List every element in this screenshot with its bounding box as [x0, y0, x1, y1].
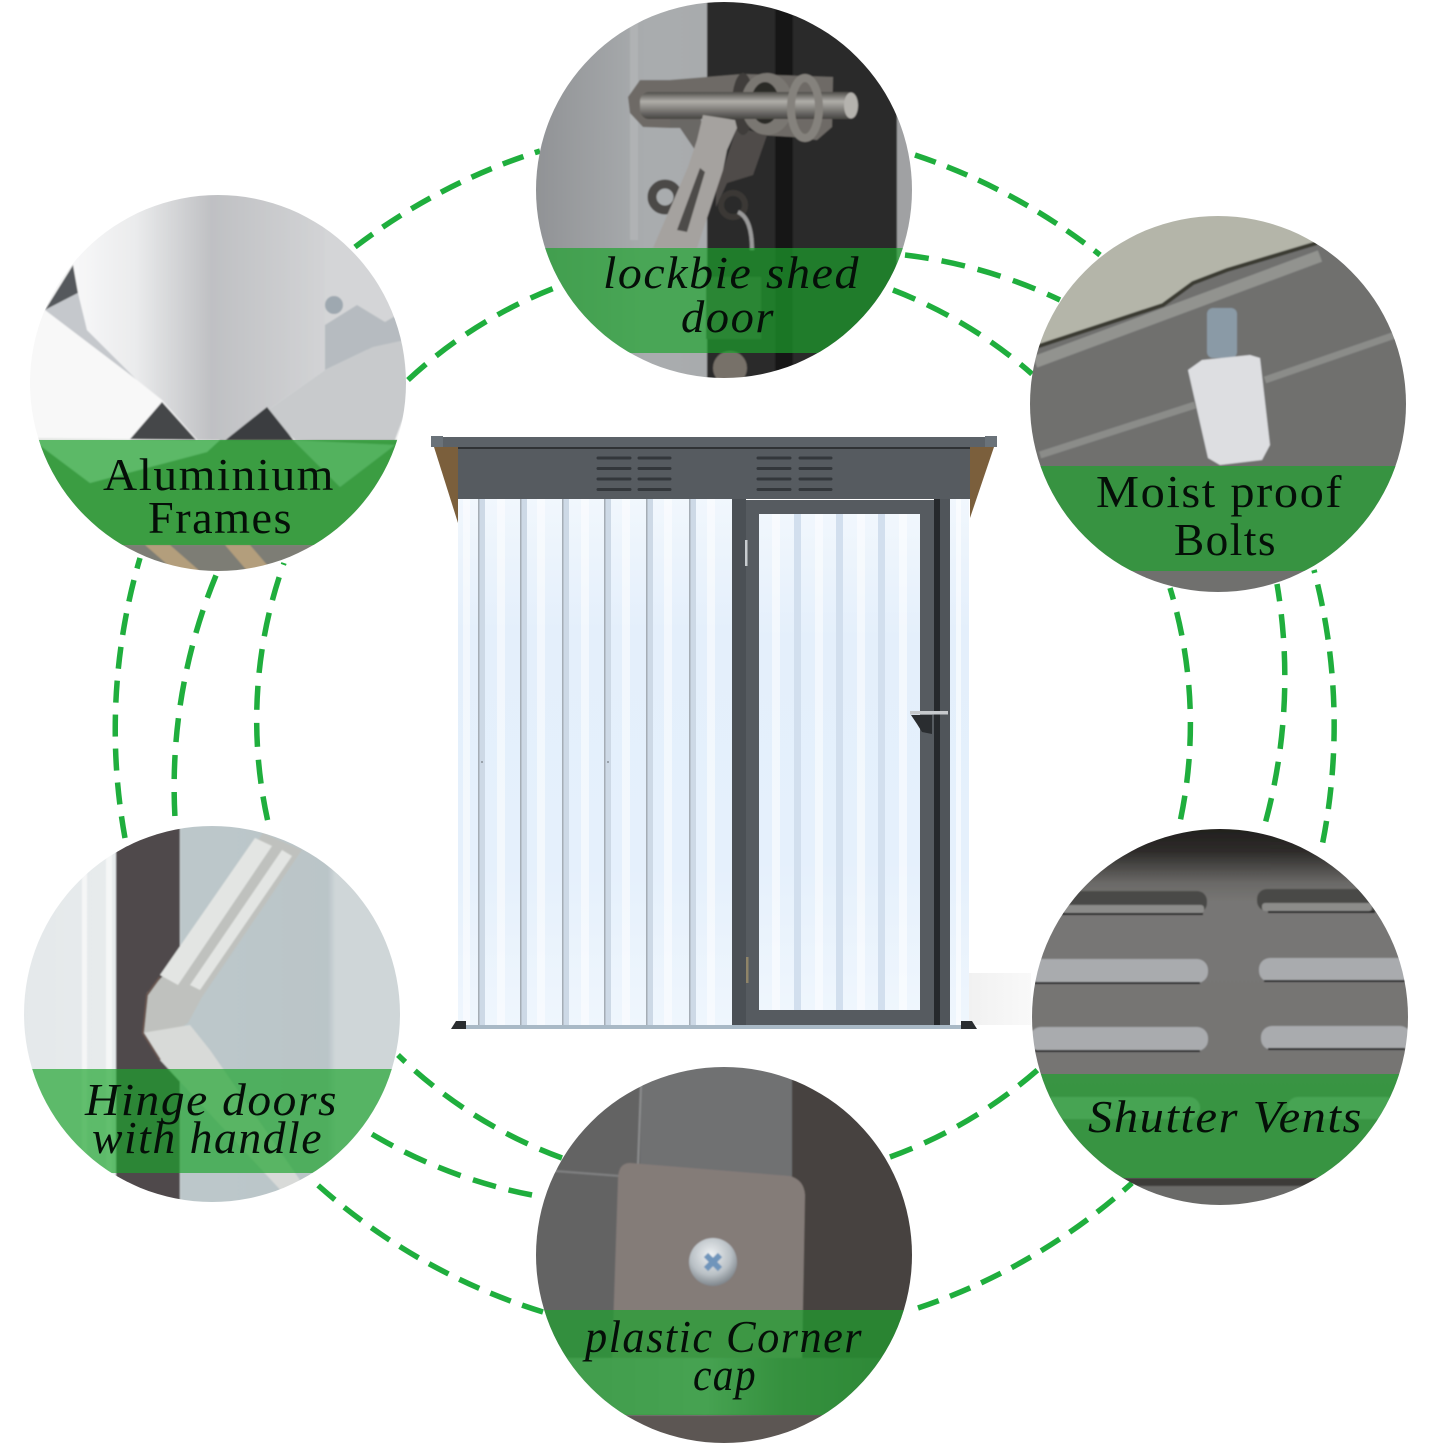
photo: bolt cap [1025, 205, 1415, 600]
dashed ring connectors [115, 151, 1334, 1312]
green label band [530, 1310, 920, 1415]
photo: louvre slots [1025, 825, 1415, 1211]
green label band [1025, 1074, 1415, 1178]
roof eaves [434, 447, 994, 523]
wall panel right [950, 499, 969, 1025]
green label band [530, 248, 920, 353]
photo: corner cap and screw [530, 1060, 922, 1445]
wall panel left [458, 499, 732, 1025]
green label band [25, 440, 415, 545]
label: lockbie shed door [603, 247, 860, 342]
door opening [759, 514, 920, 1010]
panel: aluminium frames [38, 195, 406, 571]
label: Moist proof Bolts: Moist proof [1096, 466, 1343, 517]
vents [598, 458, 831, 490]
label: Moist proof Bolts [1096, 466, 1343, 565]
label: Hinge doors with handle: Hinge doors [84, 1074, 338, 1125]
label: Hinge doors with handle: with handle [92, 1112, 323, 1163]
label: plastic Corner cap [582, 1311, 863, 1400]
panel: moist proof bolts [1025, 205, 1415, 600]
door latch [910, 711, 948, 734]
base rail and feet [451, 1021, 977, 1029]
green label band [20, 1069, 405, 1173]
label: Shutter Vents: Shutter Vents [1088, 1091, 1363, 1142]
photo: frame corner [38, 195, 406, 571]
photo: hasp lock [530, 0, 922, 385]
label: Hinge doors with handle [84, 1074, 338, 1163]
label: plastic Corner cap: plastic Corner [582, 1311, 863, 1362]
label: Aluminium Frames: Frames [148, 492, 293, 543]
door frame [746, 500, 934, 1025]
label: lockbie shed door: door [681, 291, 775, 342]
photo: hinge [20, 825, 405, 1205]
header panel [458, 449, 970, 499]
panel: shutter vents [1025, 825, 1415, 1211]
label: Moist proof Bolts: Bolts [1174, 514, 1277, 565]
panel: hinge doors with handle [20, 825, 405, 1205]
hinges [745, 540, 748, 983]
label: lockbie shed door: lockbie shed [603, 247, 860, 298]
central shed illustration [431, 436, 997, 1029]
door post right [934, 499, 950, 1025]
roof [431, 436, 997, 450]
green label band [1025, 466, 1415, 571]
label: plastic Corner cap: cap [693, 1349, 757, 1400]
panel: lockable shed door [530, 0, 922, 385]
panel: plastic corner cap [530, 1060, 922, 1445]
label: Aluminium Frames: Aluminium [103, 449, 335, 500]
label: Aluminium Frames [103, 449, 335, 543]
shed floor shadow [969, 973, 1031, 1025]
door post left [732, 499, 746, 1025]
